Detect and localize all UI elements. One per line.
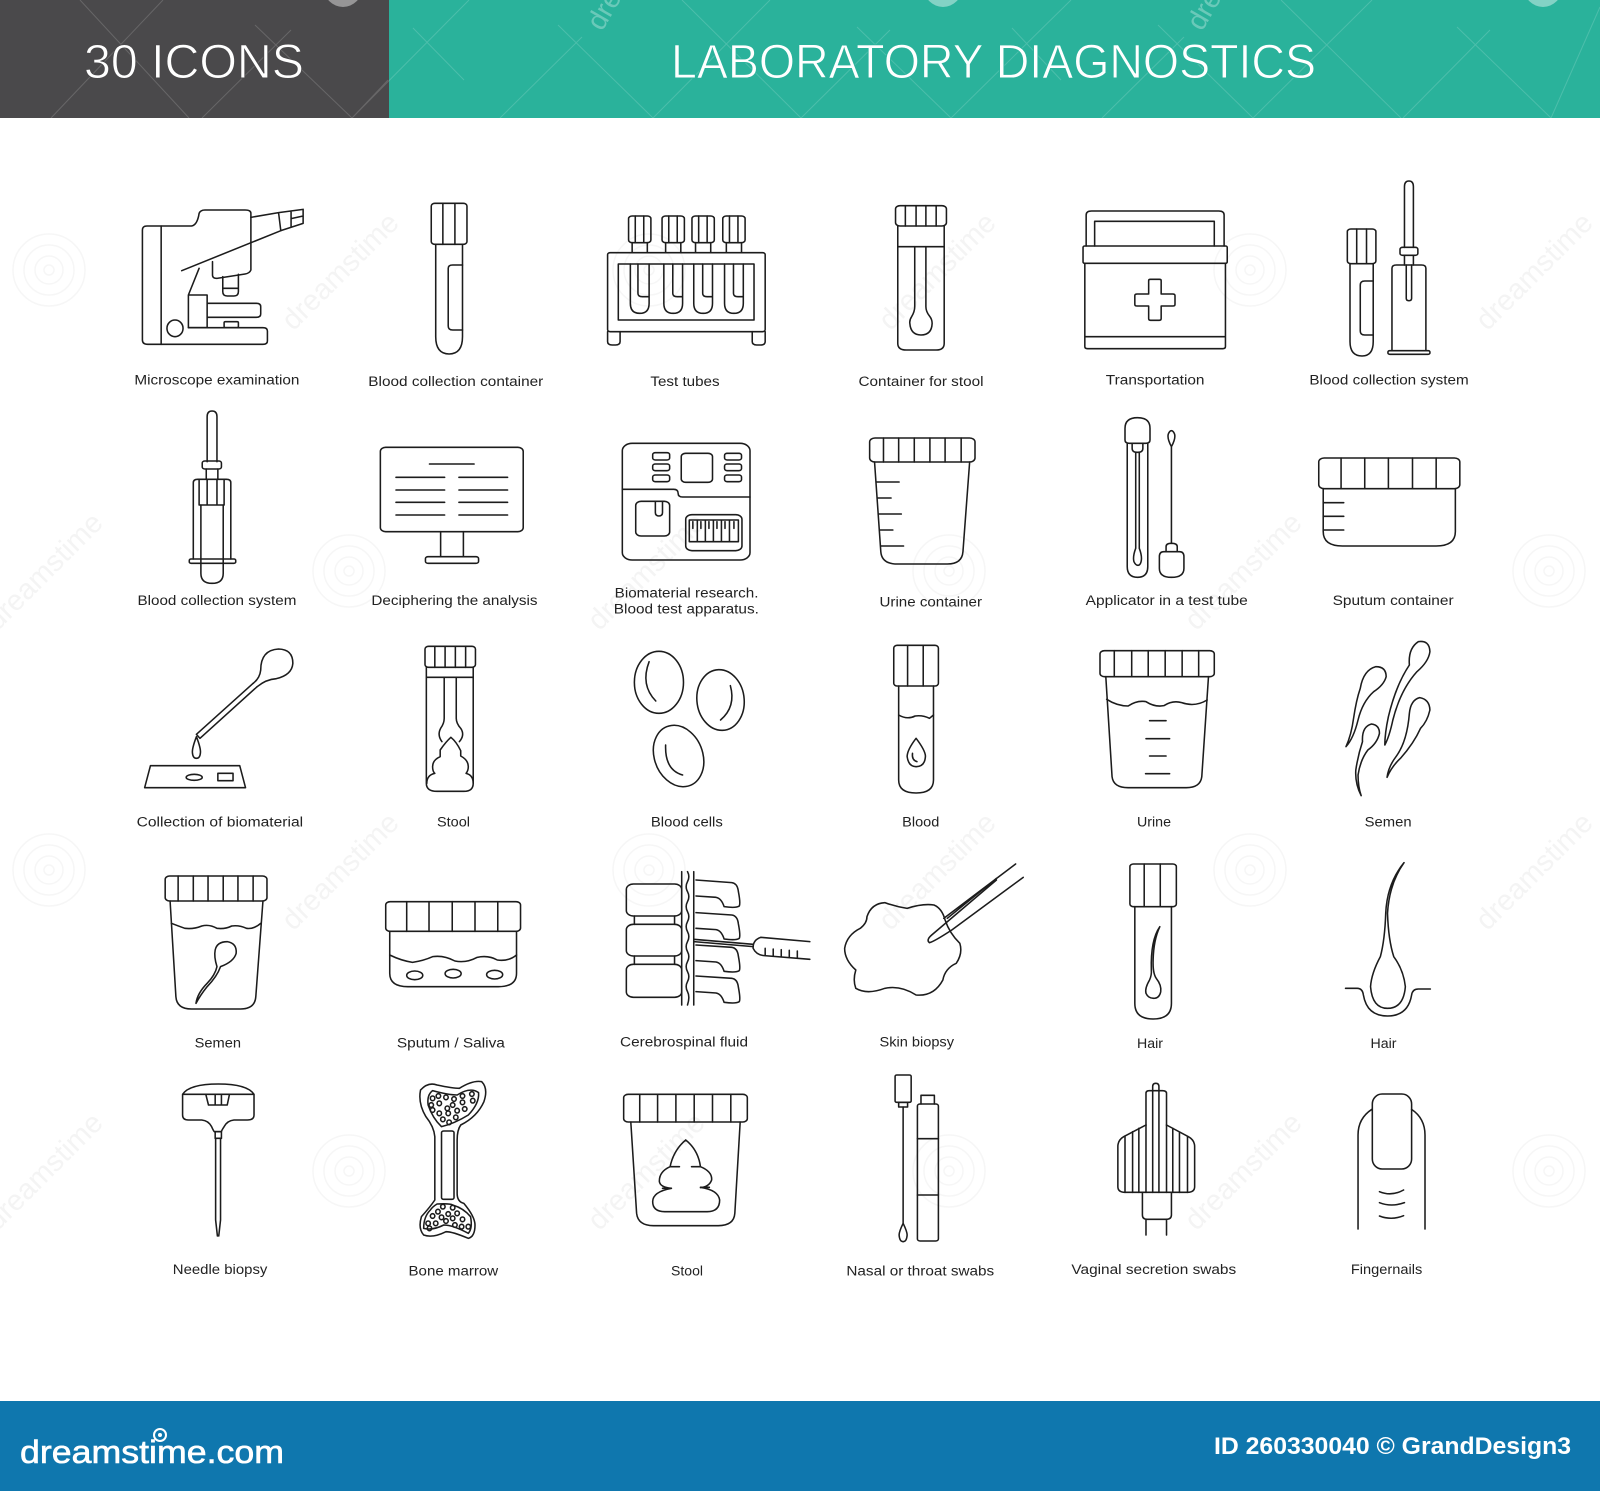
icon: transportation case — [1083, 211, 1227, 349]
icon: blood collection container — [431, 203, 467, 354]
label: Hair — [1137, 1036, 1164, 1051]
icon: test tubes rack — [608, 216, 765, 345]
label: Collection of biomaterial — [137, 815, 303, 830]
watermark background: dreamstime — [1470, 807, 1600, 937]
footer logo: dreamstime.com — [20, 1434, 284, 1470]
label: Cerebrospinal fluid — [620, 1035, 748, 1050]
icon: sperm cells — [1346, 641, 1430, 796]
icon: applicator in a test tube — [1125, 418, 1184, 577]
label: Test tubes — [650, 374, 720, 389]
icon: bone marrow — [420, 1081, 486, 1238]
label: Transportation — [1106, 372, 1204, 388]
watermark background: dreamstime — [873, 807, 1003, 937]
label: Hair — [1370, 1036, 1397, 1051]
icon: skin biopsy — [845, 864, 1023, 995]
label: Sputum / Saliva — [397, 1036, 505, 1051]
label: Stool — [437, 815, 470, 830]
icon: collection of biomaterial — [145, 649, 293, 788]
icon: urine cup — [1100, 651, 1214, 788]
icon: blood tube — [894, 645, 938, 793]
label: Fingernails — [1351, 1262, 1423, 1277]
icon: vaginal secretion swab — [1118, 1083, 1195, 1235]
label: Microscope examination — [134, 372, 299, 388]
label: Semen — [195, 1036, 241, 1051]
icon: sputum saliva container — [386, 902, 521, 987]
label: Blood collection system — [138, 593, 296, 608]
label: Blood test apparatus. — [614, 602, 759, 616]
label: Biomaterial research. — [615, 586, 758, 600]
icon: nasal or throat swab — [895, 1075, 938, 1242]
header band — [0, 0, 1600, 118]
watermark background: dreamstime — [276, 807, 406, 937]
icon: stool container — [624, 1094, 747, 1226]
label — [614, 586, 759, 616]
label: Skin biopsy — [880, 1035, 954, 1050]
watermark background: dreamstime — [1179, 1107, 1309, 1237]
label: Deciphering the analysis — [371, 593, 538, 608]
label: Sputum container — [1333, 593, 1454, 608]
footer bar — [0, 1401, 1600, 1491]
icon: microscope — [142, 209, 303, 344]
label: Urine — [1137, 815, 1171, 830]
icon: hair tube — [1130, 864, 1176, 1019]
icon: semen container — [165, 876, 267, 1009]
watermark background — [0, 207, 1600, 1237]
icon: container for stool — [896, 206, 946, 350]
icon: urine container — [870, 438, 975, 564]
watermark background: dreamstime — [276, 207, 406, 337]
label: Semen — [1365, 814, 1412, 829]
icon: stool tube — [425, 646, 475, 791]
icon: blood collection system assembled — [189, 411, 236, 583]
label: Blood collection system — [1309, 372, 1469, 388]
label: Stool — [671, 1263, 703, 1278]
label: Container for stool — [858, 374, 984, 389]
label: Vaginal secretion swabs — [1071, 1262, 1236, 1277]
icon: blood cells — [634, 651, 746, 790]
icon: sputum container — [1319, 458, 1460, 546]
label: Applicator in a test tube — [1086, 593, 1248, 608]
label: Urine container — [880, 595, 983, 610]
icon: fingernail — [1358, 1094, 1425, 1229]
label: Blood — [902, 815, 939, 830]
watermark background: dreamstime — [582, 1107, 712, 1237]
watermark background: dreamstime — [1179, 507, 1309, 637]
watermark background: dreamstime — [1470, 207, 1600, 337]
footer credit: ID 260330040 © GrandDesign3 — [1214, 1433, 1571, 1460]
label: Bone marrow — [408, 1263, 498, 1278]
icon: spine and cerebrospinal puncture — [626, 872, 810, 1005]
label: Nasal or throat swabs — [846, 1263, 994, 1278]
watermark background: dreamstime — [873, 207, 1003, 337]
icon: biopsy needle — [183, 1084, 254, 1236]
label: Needle biopsy — [173, 1262, 268, 1277]
icon: blood collection system with tube — [1347, 181, 1430, 356]
label: Blood cells — [651, 815, 723, 830]
label: Blood collection container — [368, 374, 544, 389]
title: laboratory diagnostics: LABORATORY DIAGNOSTICS — [671, 36, 1316, 89]
icon: blood test apparatus — [622, 443, 750, 560]
icon: hair follicle — [1346, 863, 1430, 1016]
watermark background: dreamstime — [582, 507, 712, 637]
heading: 30 icons: 30 ICONS — [84, 36, 304, 89]
icon: monitor — [380, 447, 523, 563]
